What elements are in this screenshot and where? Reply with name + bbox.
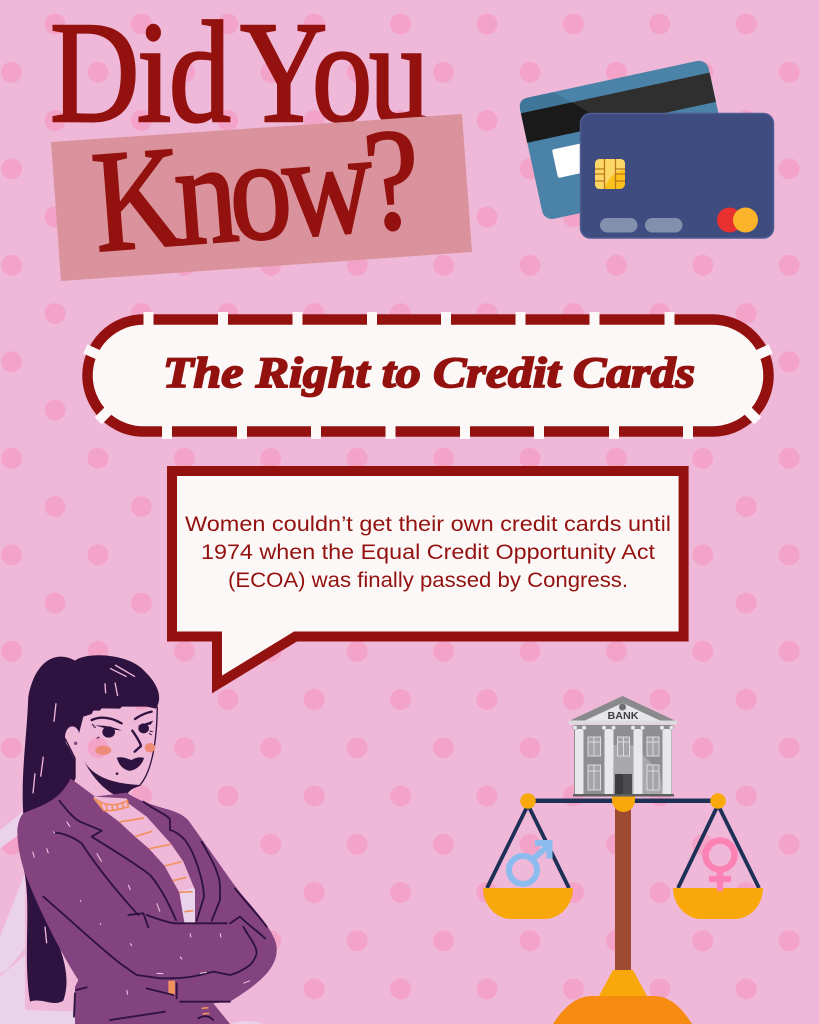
- jacket speckles: [33, 822, 250, 995]
- bank wall: [574, 725, 672, 796]
- icon: credit cards: [518, 59, 774, 238]
- scale strings: [487, 805, 759, 888]
- bank capitals: [573, 725, 674, 730]
- blush: [95, 746, 111, 755]
- highlight block behind Know?: [51, 114, 472, 281]
- bank columns: [575, 729, 672, 795]
- jacket cuff detail: [168, 981, 175, 995]
- bank steps: [573, 794, 674, 796]
- jaw line: [140, 707, 157, 785]
- icon: male symbol: [509, 843, 552, 884]
- ear: [65, 726, 80, 748]
- title word: Know?: Know?: [87, 99, 421, 283]
- bank label: BANK: [608, 711, 639, 722]
- eyelashes: [92, 724, 153, 738]
- heading text: The Right to Credit Cards: [163, 350, 695, 397]
- illustration: scale of justice with bank: [483, 696, 763, 1024]
- card logo: [717, 208, 758, 232]
- bubble text: Women couldn’t get their own credit cards until: [185, 512, 671, 536]
- bank windows: [588, 737, 659, 790]
- nose: [132, 731, 141, 752]
- dashed pill border: [85, 312, 771, 439]
- chip: [595, 159, 625, 189]
- illustration: woman with crossed arms: [0, 655, 277, 1024]
- icon: female symbol: [706, 840, 734, 891]
- pale background swooshes: [0, 812, 263, 1024]
- bubble shape: [172, 471, 684, 684]
- bank door: [615, 774, 632, 795]
- hair: ponytail and fringe: [23, 655, 159, 1003]
- neck shadow: [84, 761, 142, 798]
- eyes: [95, 721, 153, 738]
- title: Did You Know?: [50, 0, 472, 283]
- heading pill: The Right to Credit Cards: [85, 312, 771, 439]
- scale base: [553, 996, 692, 1024]
- left pan: [483, 888, 573, 919]
- sweater: [94, 798, 209, 1014]
- speech bubble: [172, 471, 684, 684]
- bubble text: (ECOA) was finally passed by Congress.: [228, 568, 628, 592]
- bubble text: 1974 when the Equal Credit Opportunity Act: [201, 540, 655, 564]
- eyebrows: [92, 712, 152, 723]
- earring: [74, 742, 77, 745]
- bank roof: [569, 696, 676, 721]
- bubble text: [185, 512, 671, 592]
- hair highlights: [33, 665, 135, 943]
- beauty mark: [116, 772, 118, 775]
- right pan: [673, 888, 763, 919]
- scale post: [615, 808, 631, 970]
- front card: [580, 114, 774, 238]
- jacket with sweater opening: [17, 778, 277, 1024]
- hair edge below ear: [65, 738, 75, 778]
- lips: [117, 757, 144, 771]
- jacket outlines: [43, 801, 267, 1020]
- back card: [518, 59, 733, 221]
- scale knobs: [520, 793, 726, 812]
- scale beam: [528, 798, 718, 803]
- icon: bank building: [569, 696, 677, 796]
- card number pills: [600, 218, 682, 232]
